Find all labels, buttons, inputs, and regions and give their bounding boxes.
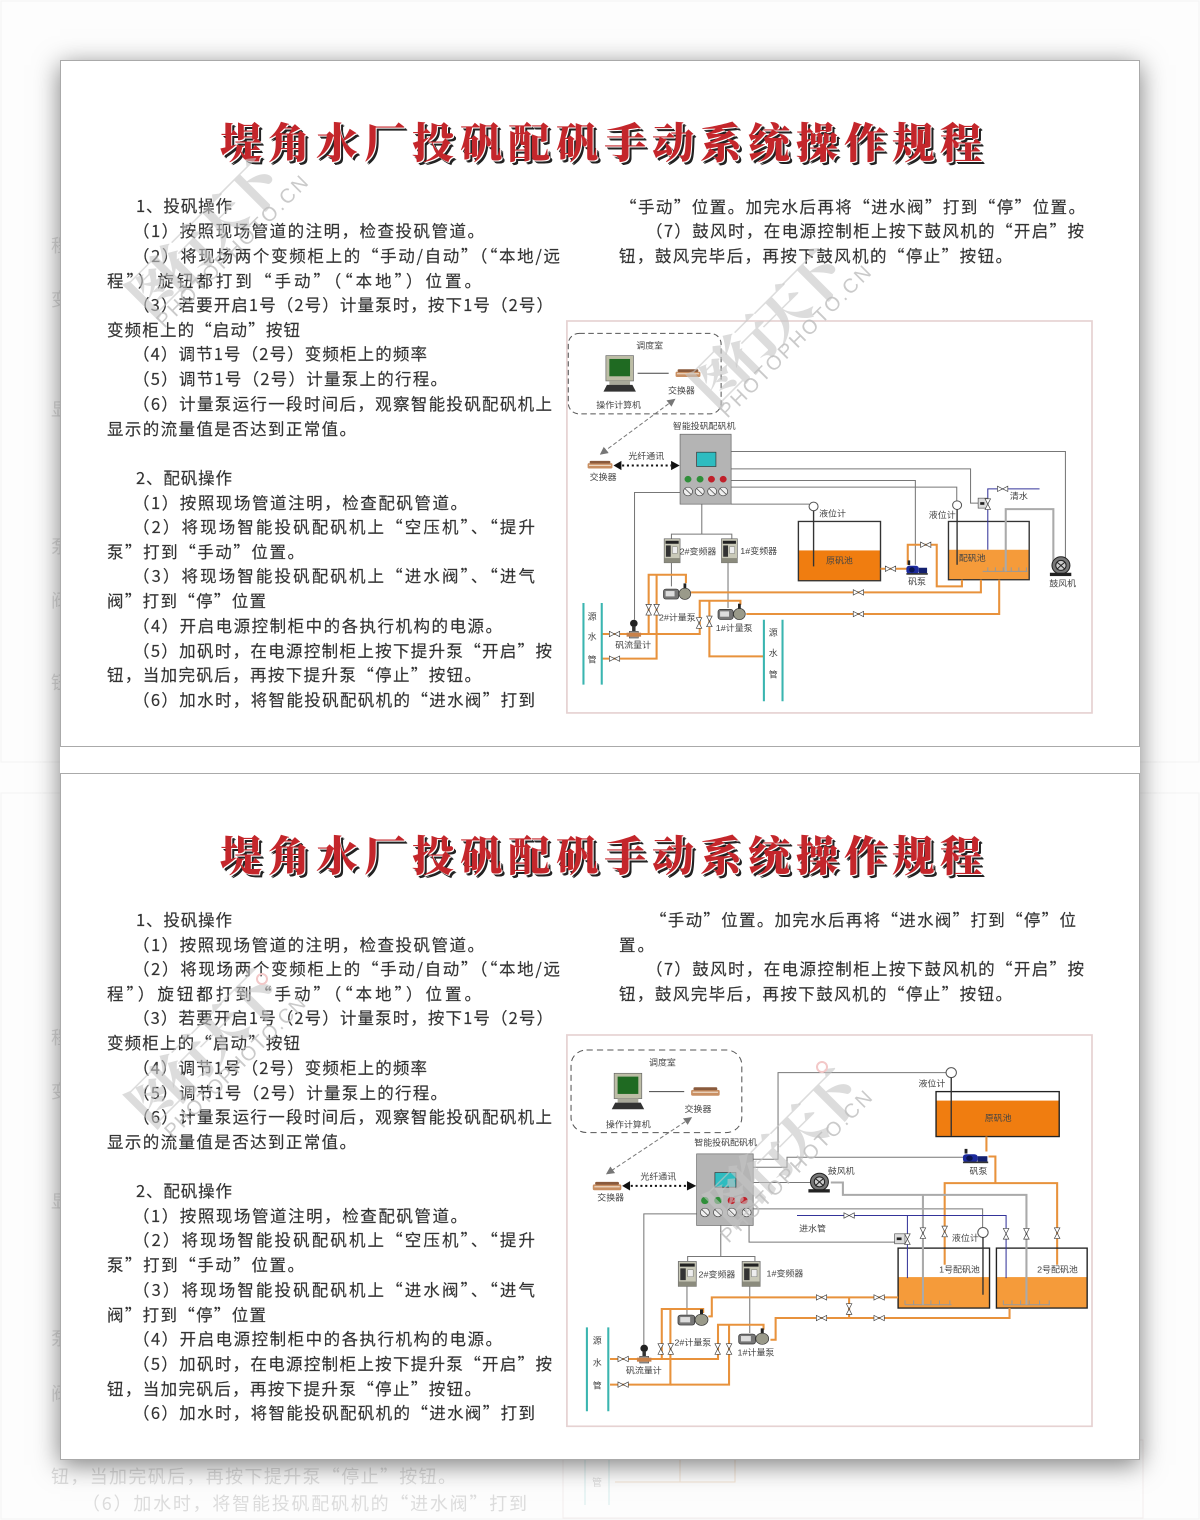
- text block: lower right column: 钮，鼓风完毕后，再按下鼓风机的“停止”按钮。: [619, 981, 1012, 1005]
- alum dosing cabinet: [694, 1137, 757, 1225]
- text block: upper left column: （1）按照现场管道注明，检查配矾管道。: [133, 490, 467, 514]
- fiber link: [593, 1118, 696, 1202]
- inverters: 1#变频器: [767, 1268, 804, 1279]
- watermark: upper right: 图行天下: [680, 239, 859, 418]
- title: lower sheet: 堤角水厂投矾配矾手动系统操作规程: [220, 834, 982, 881]
- inverters: 2#变频器: [699, 1269, 736, 1280]
- text block: upper left column: 变频柜上的“启动”按钮: [107, 317, 300, 341]
- fiber link: 交换器: [590, 471, 617, 482]
- alum dosing pipes: [610, 1295, 1010, 1387]
- raw alum tank: 原矾池: [826, 555, 853, 565]
- text block: upper left column: （5）调节1号（2号）计量泵上的行程。: [133, 366, 447, 390]
- text block: lower left column: （5）加矾时，在电源控制柜上按下提升泵“开启”按: [133, 1351, 552, 1375]
- text block: upper left column: 显示的流量值是否达到正常值。: [107, 416, 356, 440]
- text block: lower left column: （2）将现场两个变频柜上的“手动/自动”（“本地/远: [133, 956, 560, 980]
- watermark: lower left: PHOTOPHOTO.CN: [160, 993, 310, 1143]
- text block: upper left column: （4）调节1号（2号）变频柜上的频率: [133, 341, 427, 365]
- panel: lower sheet: [60, 773, 1140, 1460]
- source water pipe: 水: [593, 1356, 602, 1367]
- text block: upper left column: （5）加矾时，在电源控制柜上按下提升泵“开启”按: [133, 638, 552, 662]
- text block: upper left column: （1）按照现场管道的注明，检查投矾管道。: [133, 218, 484, 242]
- ghost page behind: 程: [51, 1024, 69, 1050]
- alum pump: [906, 560, 928, 587]
- flow meter: 矾流量计: [626, 1365, 662, 1376]
- text block: upper right column: “手动”位置。加完水后再将“进水阀”打到“停”位置。: [620, 194, 1085, 218]
- source water pipe: [587, 1327, 608, 1411]
- text block: upper left column: 程”）旋钮都打到“手动”（“本地”）位置。: [107, 268, 481, 292]
- alum pump: 矾泵: [908, 577, 926, 587]
- text block: lower left column: 泵”打到“手动”位置。: [107, 1252, 304, 1276]
- diagram: lower dual-tank process: [567, 1035, 1092, 1426]
- ghost page behind: 泵: [51, 533, 69, 559]
- ghost page behind: 管: [592, 1474, 602, 1489]
- text block: upper left column: （3）若要开启1号（2号）计量泵时，按下1号（2号）: [133, 292, 553, 316]
- text block: lower left column: 1、投矾操作: [136, 907, 232, 931]
- text block: lower left column: 程”）旋钮都打到“手动”（“本地”）位置。: [107, 981, 481, 1005]
- text block: upper left column: 1、投矾操作: [136, 193, 232, 217]
- text block: upper left column: （2）将现场两个变频柜上的“手动/自动”（“本地/远: [133, 243, 560, 267]
- text block: lower right column: （7）鼓风时，在电源控制柜上按下鼓风机的“开启”按: [646, 956, 1084, 980]
- text block: upper left column: （6）加水时，将智能投矾配矾机的“进水阀”打到: [133, 687, 535, 711]
- watermark: lower right: 图行天下: [696, 1059, 875, 1238]
- ghost page behind: 钮，当加完矾后，再按下提升泵“停止”按钮。: [51, 1463, 456, 1489]
- ghost page behind: 阀: [51, 1380, 69, 1406]
- ghost page behind: （6）加水时，将智能投矾配矾机的“进水阀”打到: [82, 1490, 527, 1516]
- ghost page behind: 显: [51, 1188, 69, 1214]
- dispatch room: 调度室: [636, 339, 663, 350]
- inverters: [664, 539, 777, 563]
- text block: lower left column: （6）加水时，将智能投矾配矾机的“进水阀”打到: [133, 1400, 535, 1424]
- flow meter: 矾流量计: [615, 639, 651, 650]
- clean water valve: 清水: [1010, 490, 1028, 501]
- text block: lower left column: （5）调节1号（2号）计量泵上的行程。: [133, 1080, 447, 1104]
- ghost page behind: 程: [51, 232, 69, 258]
- source water pipes: 管: [588, 654, 597, 665]
- mixing tanks: [898, 1227, 1087, 1308]
- text block: upper left column: （4）开启电源控制柜中的各执行机构的电源。: [133, 613, 502, 637]
- metering pumps: 2#计量泵: [674, 1337, 711, 1347]
- source water pipes: [583, 603, 783, 701]
- fiber link: 交换器: [597, 1192, 624, 1202]
- water inlet pipes: [797, 1213, 1006, 1278]
- blower: [1006, 509, 1076, 589]
- inverters: [678, 1261, 804, 1286]
- metering pumps: 2#计量泵: [659, 612, 696, 622]
- watermark: upper left: PHOTOPHOTO.CN: [152, 172, 313, 332]
- watermark: lower left: 图行天下: [117, 959, 296, 1138]
- metering pumps: 1#计量泵: [738, 1347, 775, 1357]
- raw alum tank: 液位计: [819, 508, 846, 518]
- text block: upper left column: （3）将现场智能投矾配矾机上“进水阀”、“进气: [133, 563, 535, 587]
- watermark stamps: [257, 974, 827, 1072]
- text block: lower left column: （3）若要开启1号（2号）计量泵时，按下1号（2号）: [133, 1005, 553, 1029]
- text block: lower left column: [107, 907, 560, 1424]
- metering pumps: 1#计量泵: [716, 622, 753, 633]
- inverters: 2#变频器: [680, 546, 717, 556]
- alum dosing cabinet: 智能投矾配矾机: [694, 1137, 757, 1148]
- flow meter: [626, 1345, 662, 1376]
- source water pipes: 源: [588, 612, 597, 621]
- text block: lower left column: （1）按照现场管道的注明，检查投矾管道。: [133, 932, 484, 956]
- dispatch room: 交换器: [668, 385, 695, 396]
- mixing tanks: 2号配矾池: [1037, 1264, 1078, 1275]
- text block: upper left column: 阀”打到“停”位置: [107, 588, 266, 612]
- watermark: lower right: PHOTOPHOTO.CN: [716, 1087, 877, 1247]
- text block: lower left column: 钮，当加完矾后，再按下提升泵“停止”按钮。: [107, 1376, 481, 1400]
- source water pipe: 源: [593, 1335, 602, 1345]
- text block: lower left column: （4）开启电源控制柜中的各执行机构的电源。: [133, 1326, 502, 1350]
- inverters: 1#变频器: [740, 545, 777, 556]
- text block: upper left column: 钮，当加完矾后，再按下提升泵“停止”按钮。: [107, 662, 481, 686]
- flow meter: [615, 620, 651, 650]
- source water pipe: 管: [593, 1379, 602, 1390]
- control lines: [635, 452, 1065, 620]
- ghost page behind: 钮: [51, 669, 69, 695]
- text block: upper right column: （7）鼓风时，在电源控制柜上按下鼓风机的“开启”按: [646, 218, 1084, 242]
- raw alum tank: [918, 1068, 1059, 1137]
- text block: upper left column: （2）将现场智能投矾配矾机上“空压机”、“提升: [133, 514, 535, 538]
- dispatch room: 操作计算机: [596, 399, 641, 410]
- dispatch room: 操作计算机: [606, 1119, 651, 1130]
- blower: 鼓风机: [1049, 578, 1076, 589]
- mixing tanks: 液位计: [952, 1232, 979, 1243]
- source water pipes: 源: [769, 627, 778, 637]
- title: upper sheet: 堤角水厂投矾配矾手动系统操作规程: [220, 121, 982, 168]
- ghost page behind: 阀: [51, 587, 69, 613]
- metering pumps: [659, 583, 753, 633]
- fiber link: [588, 400, 680, 482]
- source water pipes: 管: [769, 669, 778, 680]
- water inlet pipes: 进水管: [799, 1223, 826, 1233]
- text block: lower left column: 显示的流量值是否达到正常值。: [107, 1129, 356, 1153]
- watermark: upper left: 图行天下: [117, 149, 296, 328]
- text block: upper left column: 2、配矾操作: [136, 465, 232, 489]
- fiber link: 光纤通讯: [628, 450, 664, 461]
- dispatch room: [571, 1050, 742, 1133]
- text block: upper right column: 钮，鼓风完毕后，再按下鼓风机的“停止”按钮。: [619, 243, 1012, 267]
- dispatch room: 调度室: [649, 1056, 676, 1067]
- blower and air pipes: [808, 1165, 1026, 1305]
- clean water valve: [978, 486, 1040, 550]
- ghost page behind: 泵: [51, 1325, 69, 1351]
- text block: lower left column: （4）调节1号（2号）变频柜上的频率: [133, 1055, 427, 1079]
- control lines: [644, 1073, 983, 1345]
- ghost page behind: 显: [51, 396, 69, 422]
- mixing tanks: 1号配矾池: [939, 1264, 980, 1275]
- fiber link: 光纤通讯: [640, 1171, 676, 1181]
- diagram: upper single-tank process: [567, 321, 1092, 713]
- text block: lower right column: 置。: [619, 932, 654, 956]
- watermark: upper right: PHOTOPHOTO.CN: [715, 262, 876, 422]
- text block: lower right column: “手动”位置。加完水后再将“进水阀”打到“停”位: [650, 907, 1076, 931]
- text block: lower left column: 2、配矾操作: [136, 1178, 232, 1202]
- text block: lower left column: （1）按照现场管道注明，检查配矾管道。: [133, 1203, 467, 1227]
- text block: upper left column: 泵”打到“手动”位置。: [107, 539, 304, 563]
- text block: lower left column: （6）计量泵运行一段时间后，观察智能投矾配矾机上: [133, 1104, 552, 1128]
- mixing tank: 配矾池: [959, 552, 986, 563]
- metering pumps: [674, 1309, 775, 1357]
- text block: lower left column: （2）将现场智能投矾配矾机上“空压机”、“提升: [133, 1227, 535, 1251]
- alum dosing cabinet: [673, 420, 736, 504]
- blower and air pipes: 鼓风机: [828, 1165, 855, 1176]
- dispatch room: [568, 333, 721, 414]
- alum pipes: [601, 542, 999, 661]
- source water pipes: 水: [588, 631, 597, 641]
- source water pipes: 水: [769, 647, 778, 658]
- text block: upper right column: [619, 194, 1085, 267]
- text block: lower right column: [619, 907, 1084, 1005]
- alum distribution pipes: 矾泵: [970, 1166, 988, 1176]
- tank valves: [905, 1226, 1060, 1244]
- text block: upper left column: [107, 193, 560, 711]
- raw alum tank: [798, 502, 881, 581]
- alum distribution pipes: [945, 1137, 1057, 1265]
- ghost page behind: 变: [51, 1078, 69, 1104]
- dispatch room: 交换器: [685, 1103, 712, 1114]
- ghost page behind: 变: [51, 286, 69, 312]
- mixing tank: 液位计: [929, 509, 956, 520]
- text block: lower left column: 变频柜上的“启动”按钮: [107, 1030, 300, 1054]
- text block: lower left column: 阀”打到“停”位置: [107, 1302, 266, 1326]
- text block: lower left column: （3）将现场智能投矾配矾机上“进水阀”、“进气: [133, 1277, 535, 1301]
- raw alum tank: 原矾池: [985, 1112, 1012, 1123]
- alum dosing cabinet: 智能投矾配矾机: [673, 420, 736, 431]
- panel: upper sheet: [60, 60, 1140, 747]
- raw alum tank: 液位计: [918, 1077, 946, 1088]
- mixing tank: [929, 501, 1029, 580]
- text block: upper left column: （6）计量泵运行一段时间后，观察智能投矾配矾机上: [133, 391, 552, 415]
